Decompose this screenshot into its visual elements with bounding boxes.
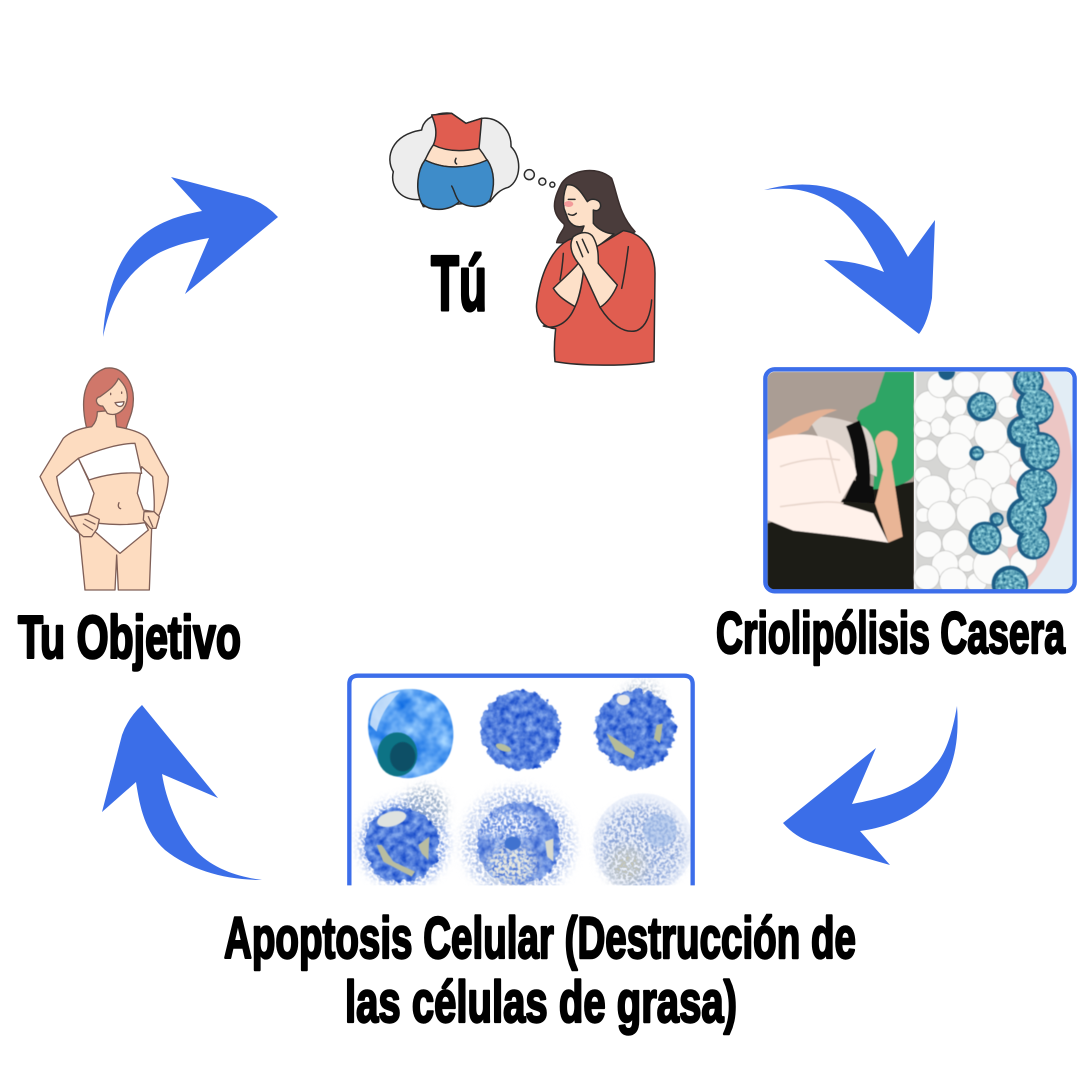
left arm gap: [57, 458, 94, 517]
image frame: [349, 676, 693, 885]
thought cloud: [390, 113, 519, 207]
skin: body and arms: [40, 410, 168, 590]
label: Tú: Tú: [431, 239, 487, 327]
photo: woman lying with cold pack: [767, 372, 915, 590]
hair: [84, 368, 133, 429]
photo panel: home cryolipolysis: [765, 363, 1075, 602]
cell stage 4: breaking cell: [360, 787, 447, 887]
label: las células de grasa: las células de grasa): [345, 970, 737, 1035]
photo frame: [765, 369, 1075, 591]
woman: face and neck: [563, 185, 614, 250]
arrow: from Tú to Criolipólisis: [764, 184, 935, 334]
woman: hair: [554, 170, 635, 243]
illustration: woman thinking about her goal body: [390, 113, 655, 365]
arrow: from Criolipólisis to Apoptosis: [783, 706, 958, 865]
arrow: from Tu Objetivo to Tú: [103, 177, 278, 337]
goal body: blue shorts: [418, 160, 493, 209]
illustration: frozen blue fat cells: [938, 363, 1060, 602]
right arm gap: [137, 467, 154, 512]
arrow: from Apoptosis to Tu Objetivo: [102, 705, 262, 880]
woman: red sweater: [536, 231, 655, 365]
white bikini bottom: [95, 523, 148, 553]
face: [96, 378, 127, 414]
cell stage 5: fragmenting cell: [463, 788, 573, 898]
white bandeau: [78, 443, 142, 480]
label: Tu Objetivo: Tu Objetivo: [18, 604, 241, 671]
cell stage 6: dissolved cell: [593, 793, 693, 893]
woman: clasped hands and forearms: [553, 233, 617, 307]
thought bubbles: [524, 170, 555, 187]
cell stage 2: wrinkled cell: [481, 690, 561, 770]
goal body: belly: [425, 145, 487, 167]
goal body: red top: [432, 113, 482, 151]
illustration: woman at goal weight: [40, 368, 168, 590]
cell stage 1: intact cell: [368, 689, 453, 778]
image panel: cell apoptosis stages: [349, 676, 693, 898]
cell stage 3: opening cell: [595, 682, 675, 770]
hands and navel: [70, 514, 99, 537]
illustration: fat cells: [914, 369, 1073, 596]
